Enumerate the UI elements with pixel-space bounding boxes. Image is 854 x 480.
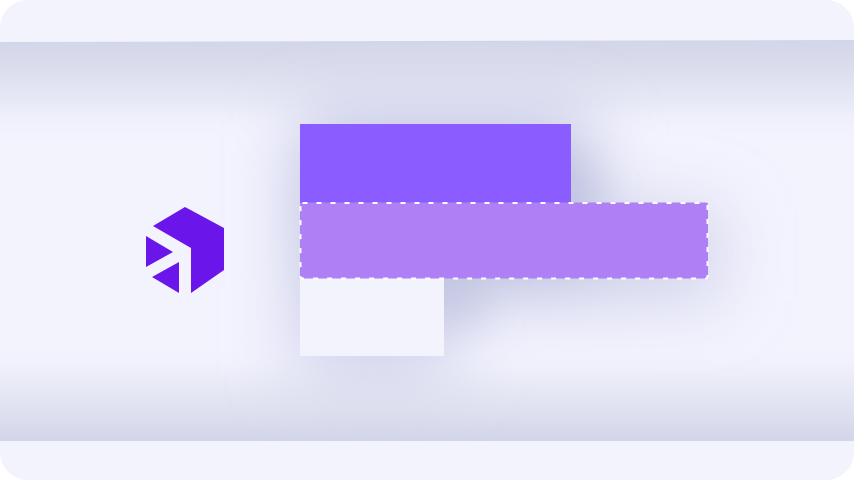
- icon: hexagon logo with arrow: [146, 207, 224, 293]
- bar: solid violet: [300, 124, 571, 203]
- soft shadows behind bars: [295, 120, 720, 375]
- bar: dashed lilac selection: [300, 202, 708, 278]
- bar: pale lavender: [300, 278, 444, 356]
